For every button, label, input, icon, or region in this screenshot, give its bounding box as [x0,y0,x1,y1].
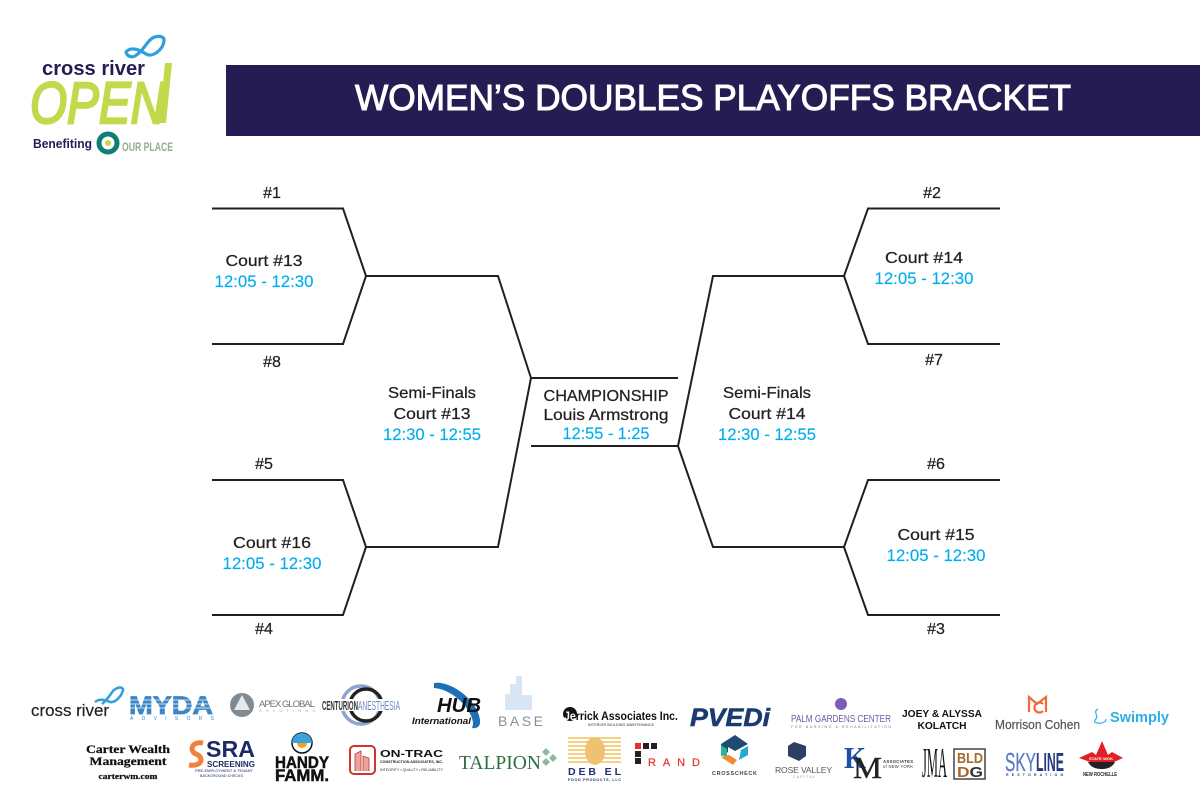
sponsor: centurion anesthesia: CENTURION [322,698,358,713]
semi-final left: 12:30 - 12:55 [383,426,481,444]
seeds left: #4 [255,621,273,638]
sponsor: bldg: DG [957,764,983,781]
sponsor: sra screening [189,736,255,778]
seeds right: #7 [925,352,943,369]
championship: 12:55 - 1:25 [562,425,650,443]
sponsor: palm gardens center: FOR NURSING & REHABILITATION [791,725,891,729]
icon: blue ribbon swirl [126,36,164,57]
sponsor: deb el: DEB EL [568,766,622,778]
seeds left: #5 [255,456,273,473]
sponsor: morrison cohen: Morrison Cohen [995,718,1080,732]
sponsor logos: JMA [922,741,947,787]
sponsor: skyline restoration: RESTORATION [1006,773,1063,777]
sponsor: on-trac construction [350,746,444,774]
sponsor: myda advisors: MYDA [129,692,213,720]
match: court 15: 12:05 - 12:30 [886,547,986,565]
sponsor: jerrick associates: INTERIOR BUILDING MAINTENANCE [588,723,655,727]
sponsor: handy famm: HANDY [275,753,330,772]
match: court 16: 12:05 - 12:30 [222,555,322,573]
sponsor: apex global [230,693,315,717]
match: court 13 [214,253,314,291]
sponsor: skyline restoration: SKY [1005,747,1036,777]
sponsor: rose valley: ROSE VALLEY [775,765,832,775]
seeds left: #8 [263,354,281,371]
sponsor: km associates: ASSOCIATES [883,759,913,764]
sponsor: hub international: International [412,716,471,727]
match: court 13: 12:05 - 12:30 [214,273,314,291]
sponsor: crosscheck [712,735,757,777]
sponsor: handy famm: FAMM. [275,766,329,785]
sponsor: on-trac construction: ON-TRAC [380,748,444,760]
match: court 14: 12:05 - 12:30 [874,270,974,288]
sponsor: apex global: SOLUTIONS [259,708,315,713]
seeds right: #3 [927,621,945,638]
semi-final left [383,385,481,444]
sponsor: sra screening: SCREENING [207,760,255,769]
seeds right: #2 [923,185,941,202]
sponsor: swimply: Swimply [1110,710,1169,726]
sponsor: on-trac construction: CONSTRUCTION ASSOCIATES, INC. [380,759,443,764]
sponsor: carter wealth management: carterwm.com [98,771,158,781]
sponsor: base realty: BASE [498,713,543,729]
semi-final left: Court #13 [394,406,471,423]
seeds left: #1 [263,185,281,202]
sponsor: pvedi: PVEDi [690,704,771,732]
sponsor: deb el [568,737,622,782]
seeds right: #6 [927,456,945,473]
event logo [30,36,173,154]
sponsor: rand [635,743,700,769]
sponsor: cross river: cross river [31,701,109,720]
match: court 15: Court #15 [898,527,975,544]
sponsor: centurion anesthesia [322,686,400,724]
sponsor: new rochelle: NEW ROCHELLE [1083,772,1117,778]
sponsor: rand: RAND [648,757,700,769]
sponsor: crosscheck: CROSSCHECK [712,771,757,777]
sponsor: km associates: K [844,740,866,775]
sponsor: centurion anesthesia: ANESTHESIA [358,698,400,713]
semi-final right: Semi-Finals [723,385,811,402]
N upstroke [159,63,172,123]
sponsor: km associates: of NEW YORK [883,764,913,769]
OPEN wordmark: OPEN [30,71,165,136]
sponsor: hub international: HUB [437,695,481,717]
match: court 16 [222,535,322,573]
sponsor: jerrick associates: Jerrick Associates Inc. [564,711,678,723]
sponsor: km associates [844,740,913,785]
sponsor: hub international [412,683,481,728]
sponsor: base realty [498,676,543,729]
sponsor: carter wealth management: Management [90,754,166,768]
title banner [226,65,1200,136]
sponsor: morrison cohen [995,697,1080,732]
semi-final right [718,385,816,444]
bracket: right lower match [678,446,1000,615]
match: court 13: Court #13 [226,253,303,270]
sponsor: joey and alyssa kolatch [902,709,982,732]
sponsor: new rochelle: STATE WOK [1089,756,1113,761]
sponsor: on-trac construction: INTEGRITY • QUALITY • RELIABILITY [380,768,443,772]
sponsor: deb el: FOOD PRODUCTS, LLC [568,778,621,782]
sponsor: joey and alyssa kolatch: KOLATCH [918,721,966,732]
sponsor: handy famm [275,733,330,785]
sponsor: new rochelle [1079,741,1123,778]
championship: CHAMPIONSHIP [544,388,668,405]
sponsor: jerrick associates [563,707,678,727]
sponsor: myda advisors: ADVISORS [130,716,215,722]
sponsor: bldg [954,749,985,781]
sponsor: rose valley [775,742,832,779]
bracket: championship lines [531,378,678,446]
match: court 14: Court #14 [885,250,963,267]
match: court 14 [874,250,974,288]
benefiting label: Benefiting [33,137,92,151]
sponsor: sra screening: PRE-EMPLOYMENT & TENANT [195,769,254,773]
semi-final left: Semi-Finals [388,385,476,402]
sponsor: sra screening: BACKGROUND CHECKS [200,774,243,778]
sponsor: km associates: M [853,750,882,785]
sponsor: talpion: TALPION [459,752,541,774]
sponsor: joey and alyssa kolatch: JOEY & ALYSSA [902,709,982,720]
match: court 16: Court #16 [233,535,311,552]
seeds left [255,185,281,638]
sponsor: palm gardens center [791,698,891,729]
sponsor: bldg: BLD [957,750,983,767]
icon: our place ring [99,134,117,152]
bracket: left upper match [212,208,531,378]
sponsor: rose valley: CAPITAL [793,775,815,779]
championship: Louis Armstrong [544,407,668,424]
sponsor: carter wealth management [86,742,170,781]
championship [544,388,668,443]
seeds right [923,185,945,638]
sponsor logos: LINE [1036,747,1064,777]
bracket: right upper match [678,208,1000,446]
semi-final right: 12:30 - 12:55 [718,426,816,444]
sponsor logos [31,676,1169,787]
our place label: OUR PLACE [122,140,173,154]
sponsor: cross river [31,687,123,720]
sponsor: apex global: APEX GLOBAL [259,699,315,710]
title: WOMEN’S DOUBLES PLAYOFFS BRACKET [355,77,1071,118]
sponsor: palm gardens center: PALM GARDENS CENTER [791,714,891,725]
cross river wordmark: cross river [42,58,145,80]
bracket: left lower match [212,378,531,615]
sponsor: carter wealth management: Carter Wealth [86,742,170,756]
match: court 15 [886,527,986,565]
semi-final right: Court #14 [728,406,806,423]
sponsor: sra screening: SRA [206,736,255,762]
